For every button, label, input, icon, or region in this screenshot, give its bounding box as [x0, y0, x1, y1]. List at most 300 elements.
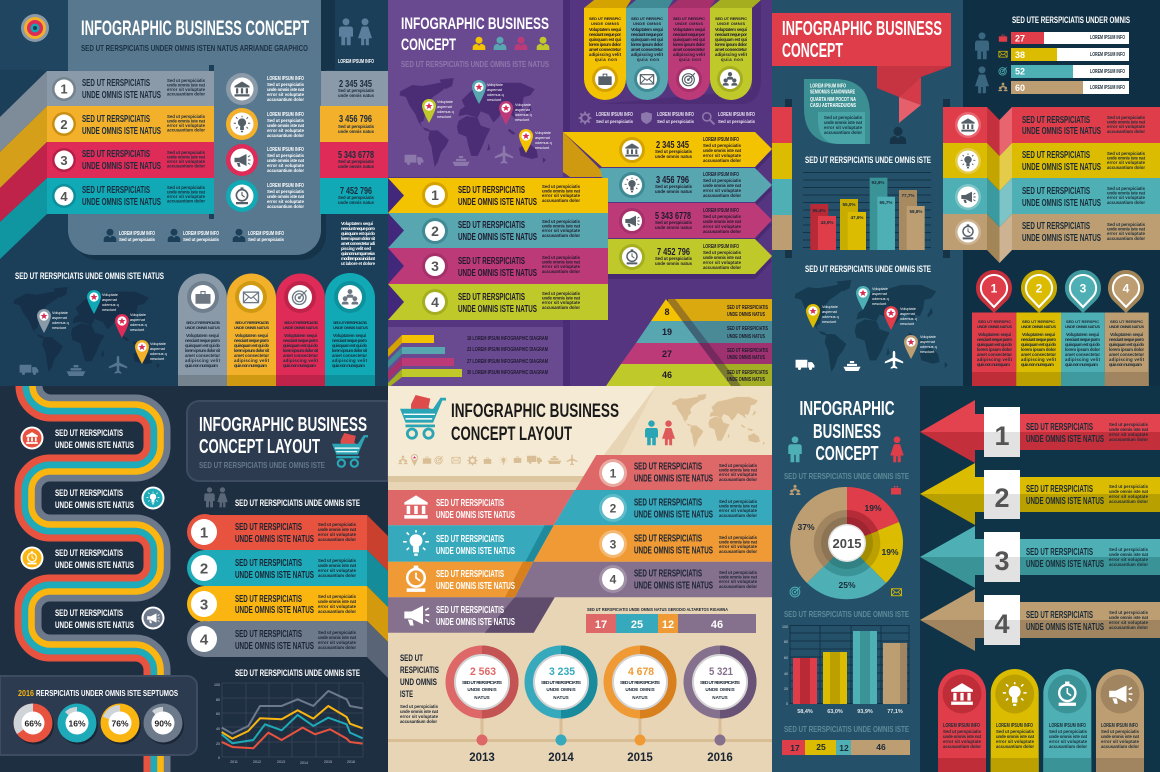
arrow 1: accusantium dolor: [1109, 437, 1148, 442]
year circles: SED UT RERSPICIATIS: [462, 680, 502, 685]
people row: LOREM IPSUM INFO: [119, 231, 155, 237]
right stat bands: 5 343 6778: [338, 150, 374, 161]
folded ribbon stack: UNDE OMNIS ISTE NATUS: [1022, 198, 1101, 209]
numbered ribbons: unde omnis iste nat: [318, 527, 357, 532]
title: CONCEPT LAYOUT: [451, 424, 572, 445]
numbered location columns: quisquam est qui do: [1065, 342, 1100, 347]
pyramid chart: SED UT RERSPICIATIS: [727, 348, 769, 354]
numbered location columns: Voluptatem sequi: [1066, 332, 1099, 337]
right ribbons: Sed ut perspiciatis: [719, 535, 758, 540]
right stat bands: unde omnis natus: [338, 93, 375, 98]
arch tabs: lorem ipsum dolor sit: [283, 348, 319, 353]
folded ribbon stack: accusantium dolor: [1107, 236, 1145, 241]
bottom arch tabs: unde omnis iste nat: [996, 734, 1035, 739]
numbered location columns: 4: [1123, 282, 1130, 296]
ribbons with numbers: unde omnis iste nat: [167, 82, 206, 88]
arch tabs: amet consectetur: [332, 353, 367, 358]
arrow 3: UNDE OMNIS ISTE NATUS: [1026, 559, 1104, 570]
panel: bottom-middle beige concept: [388, 386, 772, 772]
numbered location columns: adipiscing velit: [1021, 357, 1057, 362]
timeline icons and labels: SED UT RERSPICIATIS: [55, 608, 123, 619]
bar chart: [803, 172, 931, 250]
pyramid chart: SED UT RERSPICIATIS: [727, 370, 769, 376]
numbered location columns: [972, 270, 1149, 386]
pyramid chart: UNDE OMNIS NATUS: [727, 334, 766, 340]
right ribbons: UNDE OMNIS ISTE NATUS: [634, 580, 713, 592]
year circles: SED UT RERSPICIATIS: [620, 680, 660, 685]
arch tabs: UNDE OMNIS NATUS: [283, 325, 318, 330]
arrow 3: error sit voluptate: [1109, 557, 1149, 562]
ribbons with numbers: error sit voluptate: [167, 123, 206, 128]
folded ribbon stack: unde omnis iste nat: [1107, 226, 1146, 232]
year circles: UNDE OMNIS: [705, 687, 735, 692]
subheading pie: SED UT RERSPICIATIS UNDE OMNIS ISTE: [784, 471, 909, 481]
arch tabs: adipiscing velit: [283, 358, 319, 363]
arch tabs: SED UT RERSPICIATIS: [284, 320, 318, 325]
timeline icons and labels: [20, 426, 164, 631]
world map with pins: nesciunt: [515, 118, 530, 122]
arrow 3: 3: [994, 546, 1010, 576]
left notched ribbons: error sit voluptate: [542, 193, 581, 198]
right ribbons: accusantium dolor: [719, 513, 757, 518]
bar chart: 55,4%: [812, 208, 826, 213]
arrow 4: unde omnis iste nat: [1109, 615, 1149, 620]
top tabs: quisquam est qui: [631, 37, 663, 42]
right arrow ribbons: LOREM IPSUM INFO: [703, 208, 739, 214]
bar chart: 40: [784, 672, 788, 676]
numbered location columns: lorem ipsum dolor: [1109, 347, 1144, 352]
top tabs: Voluptatem sequi: [631, 27, 663, 32]
world map with pins: Voluptate: [102, 293, 118, 297]
top tabs: SED UT RERSPIC: [631, 16, 663, 21]
folded ribbon stack: error sit voluptate: [1107, 231, 1146, 236]
top tabs: SED UT RERSPIC: [589, 16, 621, 21]
icon row: Sed ut perspiciatis: [596, 119, 634, 124]
world map: [672, 394, 765, 447]
progress bars: 60: [1015, 83, 1025, 93]
panel: top-middle purple concept: [388, 0, 772, 388]
bottom arch tabs: error sit voluptate: [943, 739, 982, 744]
numbered ribbons: [187, 514, 388, 678]
stacked bar: 17: [790, 743, 800, 753]
arrow 1: [920, 400, 1160, 463]
arrow 3: unde omnis iste nat: [1109, 552, 1149, 557]
side text block: lorem ipsum dolor sit: [341, 236, 376, 241]
leaf callout: error sit voluptate: [824, 125, 863, 130]
top tabs: amet consectetur: [673, 47, 705, 52]
title: [401, 14, 549, 54]
arch tabs: SED UT RERSPICIATIS: [235, 320, 269, 325]
title: INFOGRAPHIC BUSINESS CONCEPT: [81, 17, 309, 40]
world map with pins: odemus q: [437, 110, 454, 114]
world map with pins: odemus q: [130, 323, 147, 327]
year circles: 2015: [627, 752, 653, 764]
icon list: accusantium dolor: [267, 133, 304, 138]
arch tabs: quisquam est qui do: [185, 343, 220, 348]
left ribbons: SED UT RERSPICIATIS: [436, 498, 504, 509]
world map with pins: nesciunt: [900, 322, 915, 326]
line chart: 40: [216, 727, 220, 731]
arrow 3: SED UT RERSPICIATIS: [1026, 547, 1093, 558]
world map with pins: [14, 287, 167, 376]
bottom arch tabs: error sit voluptate: [1049, 739, 1088, 744]
arch tabs: nesciunt neque porro: [283, 338, 318, 343]
folded ribbon stack: SED UT RERSPICIATIS: [1022, 186, 1090, 197]
bottom arch tabs: unde omnis iste nat: [1101, 734, 1140, 739]
right arrow ribbons: error sit voluptate: [703, 153, 742, 158]
world map with pins: [400, 78, 552, 167]
top tabs: quia non: [721, 57, 743, 62]
title: INFOGRAPHIC: [800, 398, 894, 420]
world map with pins: aspernat: [130, 318, 146, 322]
logo target: [21, 14, 49, 42]
numbered location columns: quisquam est qui do: [1021, 342, 1056, 347]
world map with pins: nesciunt: [102, 308, 117, 312]
horizontal 3D bars: 18 LOREM IPSUM INFOGRAPHIC DIAGRAM: [467, 336, 548, 342]
numbered ribbons: Sed ut perspiciatis: [318, 630, 357, 635]
ribbons with numbers: error sit voluptate: [167, 159, 206, 164]
bottom arch tabs: [938, 669, 1144, 772]
left ribbons: UNDE OMNIS ISTE NATUS: [436, 546, 515, 557]
side text block: [341, 221, 376, 266]
line chart: 2014: [300, 761, 308, 765]
right stat bands: unde omnis natus: [338, 200, 375, 205]
right arrow ribbons: accusantium dolor: [703, 158, 741, 163]
left notched ribbons: 2: [431, 223, 439, 239]
arch tabs: quia non numquam: [283, 363, 316, 368]
numbered location columns: nesciunt neque porro: [1021, 337, 1056, 342]
ribbons with numbers: unde omnis iste nat: [167, 118, 206, 124]
arch tabs: adipiscing velit: [185, 358, 221, 363]
arrow 1: error sit voluptate: [1109, 432, 1149, 437]
arch tabs: SED UT RERSPICIATIS: [186, 320, 220, 325]
people icons: [473, 37, 549, 50]
ribbons with numbers: SED UT RERSPICIATIS: [82, 149, 150, 160]
top tabs: lorem ipsum dolor: [589, 42, 621, 47]
numbered ribbons: UNDE OMNIS ISTE NATUS: [235, 534, 314, 545]
icon list: LOREM IPSUM INFO: [267, 112, 304, 118]
folded ribbon stack: error sit voluptate: [1107, 124, 1146, 129]
world map with pins: odemus q: [487, 93, 504, 97]
timeline icons and labels: SED UT RERSPICIATIS: [55, 488, 123, 499]
left notched ribbons: accusantium dolor: [542, 269, 580, 274]
numbered location columns: quisquam est qui do: [1109, 342, 1144, 347]
year circles: NATUS: [474, 695, 490, 700]
world map with pins: nesciunt: [535, 146, 550, 150]
folded ribbon stack: UNDE OMNIS ISTE NATUS: [1022, 126, 1101, 137]
arrow 2: SED UT RERSPICIATIS: [1026, 484, 1093, 495]
line chart: 20: [216, 742, 220, 746]
icon list: error sit voluptate: [267, 92, 305, 97]
numbered location columns: Voluptatem sequi: [1022, 332, 1055, 337]
right arrow ribbons: accusantium dolor: [703, 193, 741, 198]
right arrow ribbons: 2 345 345: [656, 140, 689, 151]
right stat bands: [320, 71, 388, 214]
leaf callout: LOREM IPSUM INFO: [810, 84, 846, 90]
segmented bar: 17: [595, 619, 607, 631]
arrow 1: Sed ut perspiciatis: [1109, 422, 1149, 427]
pyramid chart: [606, 299, 772, 386]
title: [800, 398, 894, 465]
pyramid chart: UNDE OMNIS NATUS: [727, 312, 766, 318]
folded ribbon stack: error sit voluptate: [1107, 195, 1146, 200]
donut card: 16%: [68, 718, 86, 728]
numbered ribbons: 1: [200, 524, 208, 542]
bar chart: 58,4%: [797, 709, 813, 715]
arch tabs: Voluptatem sequi: [235, 333, 268, 338]
progress bars: 27: [1015, 34, 1025, 44]
pyramid chart: 46: [662, 370, 672, 380]
title banner: INFOGRAPHIC BUSINESS: [782, 18, 942, 40]
world map with pins: Voluptate: [535, 131, 551, 135]
top tabs: nesciunt neque por: [715, 32, 747, 37]
side text block: ut labore et dolore: [341, 261, 376, 266]
numbered location columns: amet consectetur: [1021, 352, 1056, 357]
bar chart: 0: [786, 702, 788, 706]
horizontal 3D bars: 27 LOREM IPSUM INFOGRAPHIC DIAGRAM: [467, 359, 548, 365]
ribbons with numbers: accusantium dolor: [167, 92, 205, 96]
ribbons with numbers: accusantium dolor: [167, 164, 205, 168]
arrow 3: accusantium dolor: [1109, 562, 1148, 567]
arrow 2: unde omnis iste nat: [1109, 489, 1149, 494]
arch tabs: [178, 273, 375, 386]
people row: LOREM IPSUM INFO: [248, 231, 284, 237]
folded ribbon stack: SED UT RERSPICIATIS: [1022, 221, 1090, 232]
right arrow ribbons: Sed ut perspiciatis: [655, 256, 693, 261]
central slate panel: [68, 0, 321, 255]
leaf callout: accusantium dolor: [824, 130, 862, 135]
numbered location columns: quia non numquam: [1021, 362, 1054, 367]
people row: [104, 229, 285, 242]
bar chart: 63,0%: [827, 709, 843, 715]
left notched ribbons: [388, 178, 608, 320]
icon list: LOREM IPSUM INFO: [267, 76, 304, 82]
numbered location columns: adipiscing velit: [1109, 357, 1145, 362]
heading ribbons: SED UT RERSPICIATIS UNDE OMNIS ISTE: [235, 498, 360, 508]
arrow 2: UNDE OMNIS ISTE NATUS: [1026, 496, 1104, 507]
world map with pins: aspernat: [150, 347, 166, 351]
world map with pins: Voluptate: [515, 103, 531, 107]
left notched ribbons: UNDE OMNIS ISTE NATUS: [458, 232, 537, 243]
top tabs: UNDE OMNIS: [591, 21, 619, 26]
right arrow ribbons: error sit voluptate: [703, 224, 742, 229]
donut card: 2016: [18, 688, 34, 698]
heading line chart: SED UT RERSPICIATIS UNDE OMNIS ISTE: [235, 668, 360, 678]
pyramid chart: 27: [662, 349, 672, 359]
top tabs: lorem ipsum dolor: [715, 42, 747, 47]
icon row: LOREM IPSUM INFO: [657, 112, 694, 118]
right ribbons: UNDE OMNIS ISTE NATUS: [634, 474, 713, 484]
numbered ribbons: SED UT RERSPICIATIS: [235, 522, 302, 533]
year circles: 2014: [548, 752, 574, 764]
right stat bands: 2 345 345: [339, 79, 372, 90]
right ribbons: Sed ut perspiciatis: [719, 499, 758, 504]
timeline icons and labels: SED UT RERSPICIATIS: [55, 428, 123, 439]
right ribbons: error sit voluptate: [719, 508, 758, 513]
pie chart: 2015: [833, 536, 861, 551]
numbered location columns: UNDE OMNIS NATUS: [977, 324, 1012, 329]
numbered ribbons: accusantium dolor: [318, 573, 356, 578]
world map with pins: Voluptate: [920, 335, 936, 339]
right ribbons: 3: [610, 538, 617, 552]
side text: unde omnis iste nat: [400, 709, 439, 714]
numbered ribbons: 3: [200, 596, 208, 614]
icon list: Sed ut perspiciatis: [267, 118, 305, 123]
year circles: NATUS: [632, 695, 648, 700]
left notched ribbons: accusantium dolor: [542, 233, 580, 238]
world map with pins: Voluptate: [52, 311, 68, 315]
top tabs: UNDE OMNIS: [675, 21, 703, 26]
right arrow ribbons: LOREM IPSUM INFO: [703, 137, 739, 143]
ribbons with numbers: unde omnis iste nat: [167, 154, 206, 160]
world map with pins: aspernat: [52, 316, 68, 320]
horizontal 3D bars: [388, 335, 548, 388]
year circles: UNDE OMNIS: [467, 687, 497, 692]
numbered ribbons: unde omnis iste nat: [318, 599, 357, 604]
world map with pins: aspernat: [822, 310, 838, 314]
line chart: 60: [216, 712, 220, 716]
left notched ribbons: 1: [431, 187, 439, 203]
year circles: SED UT RERSPICIATIS: [700, 680, 740, 685]
heading map: SED UT RERSPICIATIS UNDE OMNIS ISTE: [805, 264, 931, 274]
pyramid chart: SED UT RERSPICIATIS: [727, 305, 769, 311]
arch tabs: UNDE OMNIS NATUS: [234, 325, 269, 330]
title: INFOGRAPHIC BUSINESS: [451, 401, 619, 422]
left notched ribbons: unde omnis iste nat: [542, 188, 581, 194]
arch tabs: amet consectetur: [283, 353, 318, 358]
world map with pins: odemus q: [900, 317, 917, 321]
right ribbons: [515, 455, 772, 597]
world map with pins: aspernat: [900, 312, 916, 316]
side text: accusantium dolor: [400, 719, 437, 724]
arrow 4: error sit voluptate: [1109, 620, 1149, 625]
year circles: UNDE OMNIS: [625, 687, 655, 692]
donut card: [0, 676, 197, 755]
arrow 4: Sed ut perspiciatis: [1109, 610, 1149, 615]
side text block: piscing velit sed: [341, 246, 371, 251]
right stat bands: Sed ut perspiciatis: [338, 88, 375, 93]
arch tabs: amet consectetur: [185, 353, 220, 358]
progress bars: LOREM IPSUM INFO: [1090, 52, 1125, 58]
right ribbons: accusantium dolor: [719, 477, 757, 482]
ribbons with numbers: 4: [60, 189, 68, 204]
world map with pins: Voluptate: [437, 100, 453, 104]
arch tabs: Voluptatem sequi: [284, 333, 317, 338]
side text: SED UT: [400, 653, 423, 663]
world map with pins: odemus q: [102, 303, 119, 307]
left notched ribbons: SED UT RERSPICIATIS: [458, 292, 525, 303]
right arrow ribbons: Sed ut perspiciatis: [703, 250, 742, 255]
numbered location columns: UNDE OMNIS NATUS: [1021, 324, 1056, 329]
horizontal 3D bars: 30 LOREM IPSUM INFOGRAPHIC DIAGRAM: [467, 370, 548, 376]
folded ribbon stack: accusantium dolor: [1107, 129, 1145, 134]
folded ribbon stack: unde omnis iste nat: [1107, 156, 1146, 160]
people row: Sed ut perspiciatis: [248, 237, 285, 242]
bar chart: 80: [784, 640, 788, 644]
top tabs: amet consectetur: [715, 47, 747, 52]
pie chart: 37%: [797, 522, 815, 532]
left ribbons: UNDE OMNIS ISTE NATUS: [436, 581, 515, 592]
icon: man and woman: [204, 487, 228, 507]
side text: RESPICIATIS: [400, 665, 439, 675]
arrow 2: Sed ut perspiciatis: [1109, 484, 1149, 489]
ribbons with numbers: UNDE OMNIS ISTE NATUS: [82, 90, 161, 101]
bottom arch tabs: Sed ut perspiciatis: [1049, 729, 1088, 734]
ribbons with numbers: Sed ut perspiciatis: [167, 114, 206, 119]
pie chart: [790, 485, 903, 599]
world map with pins: aspernat: [535, 136, 551, 140]
arrow 3: [920, 526, 1160, 588]
arrow 4: [920, 589, 1160, 651]
numbered location columns: nesciunt neque porro: [1109, 337, 1144, 342]
progress bars: 52: [1015, 66, 1025, 76]
top tabs: Voluptatem sequi: [589, 27, 621, 32]
right arrow ribbons: unde omnis iste nat: [703, 255, 742, 260]
folded ribbon stack: [943, 99, 1160, 263]
title card: CONCEPT LAYOUT: [199, 436, 320, 458]
right stat bands: 7 452 796: [340, 186, 372, 197]
world map with pins: nesciunt: [822, 320, 837, 324]
world map with pins: [795, 280, 948, 372]
numbered location columns: lorem ipsum dolor: [1021, 347, 1056, 352]
numbered ribbons: SED UT RERSPICIATIS: [235, 629, 302, 640]
arch tabs: nesciunt neque porro: [185, 338, 220, 343]
arch tabs: Voluptatem sequi: [186, 333, 219, 338]
left notched ribbons: 3: [431, 258, 439, 274]
numbered ribbons: SED UT RERSPICIATIS: [235, 594, 302, 605]
right ribbons: error sit voluptate: [719, 579, 758, 584]
stacked bar: 12: [839, 743, 849, 753]
panel: bottom-right arrows concept: [772, 386, 1160, 772]
label lorem: LOREM IPSUM INFO: [338, 59, 374, 65]
world map with pins: odemus q: [535, 141, 552, 145]
numbered ribbons: Sed ut perspiciatis: [318, 522, 357, 527]
ribbons with numbers: accusantium dolor: [167, 198, 205, 204]
year circles: UNDE OMNIS: [546, 687, 576, 692]
line chart: 0: [218, 756, 220, 760]
bottom arch tabs: Sed ut perspiciatis: [943, 729, 982, 734]
right arrow ribbons: Sed ut perspiciatis: [655, 220, 693, 225]
donut card: 66%: [24, 718, 42, 728]
icon list: [226, 73, 305, 212]
top tabs: UNDE OMNIS: [633, 21, 661, 26]
top tabs: amet consectetur: [631, 47, 663, 52]
bar chart: 77,7%: [901, 193, 915, 198]
stacked bar: [782, 740, 910, 755]
left notched ribbons: error sit voluptate: [542, 300, 581, 305]
numbered location columns: Voluptatem sequi: [978, 332, 1011, 337]
snake ribbon: [18, 380, 167, 772]
world map with pins: Voluptate: [487, 83, 503, 87]
top tabs: adipiscing velit: [673, 52, 706, 57]
pie chart: 19%: [881, 547, 899, 557]
bottom arch tabs: unde omnis iste nat: [1049, 734, 1088, 739]
numbered ribbons: Sed ut perspiciatis: [318, 594, 357, 599]
folded ribbon stack: Sed ut perspiciatis: [1107, 115, 1146, 120]
numbered ribbons: UNDE OMNIS ISTE NATUS: [235, 605, 314, 616]
icon row: LOREM IPSUM INFO: [596, 112, 633, 118]
right arrow ribbons: unde omnis natus: [655, 189, 693, 194]
top tabs: nesciunt neque por: [631, 32, 663, 37]
icon list: unde omnis iste nat: [267, 194, 305, 199]
right arrow ribbons: LOREM IPSUM INFO: [703, 244, 739, 250]
left notched ribbons: error sit voluptate: [542, 228, 581, 233]
numbered location columns: adipiscing velit: [977, 357, 1013, 362]
left notched ribbons: error sit voluptate: [542, 264, 581, 269]
world map with pins: Voluptate: [900, 307, 916, 311]
icon row: LOREM IPSUM INFO: [718, 112, 755, 118]
arch tabs: amet consectetur: [234, 353, 269, 358]
